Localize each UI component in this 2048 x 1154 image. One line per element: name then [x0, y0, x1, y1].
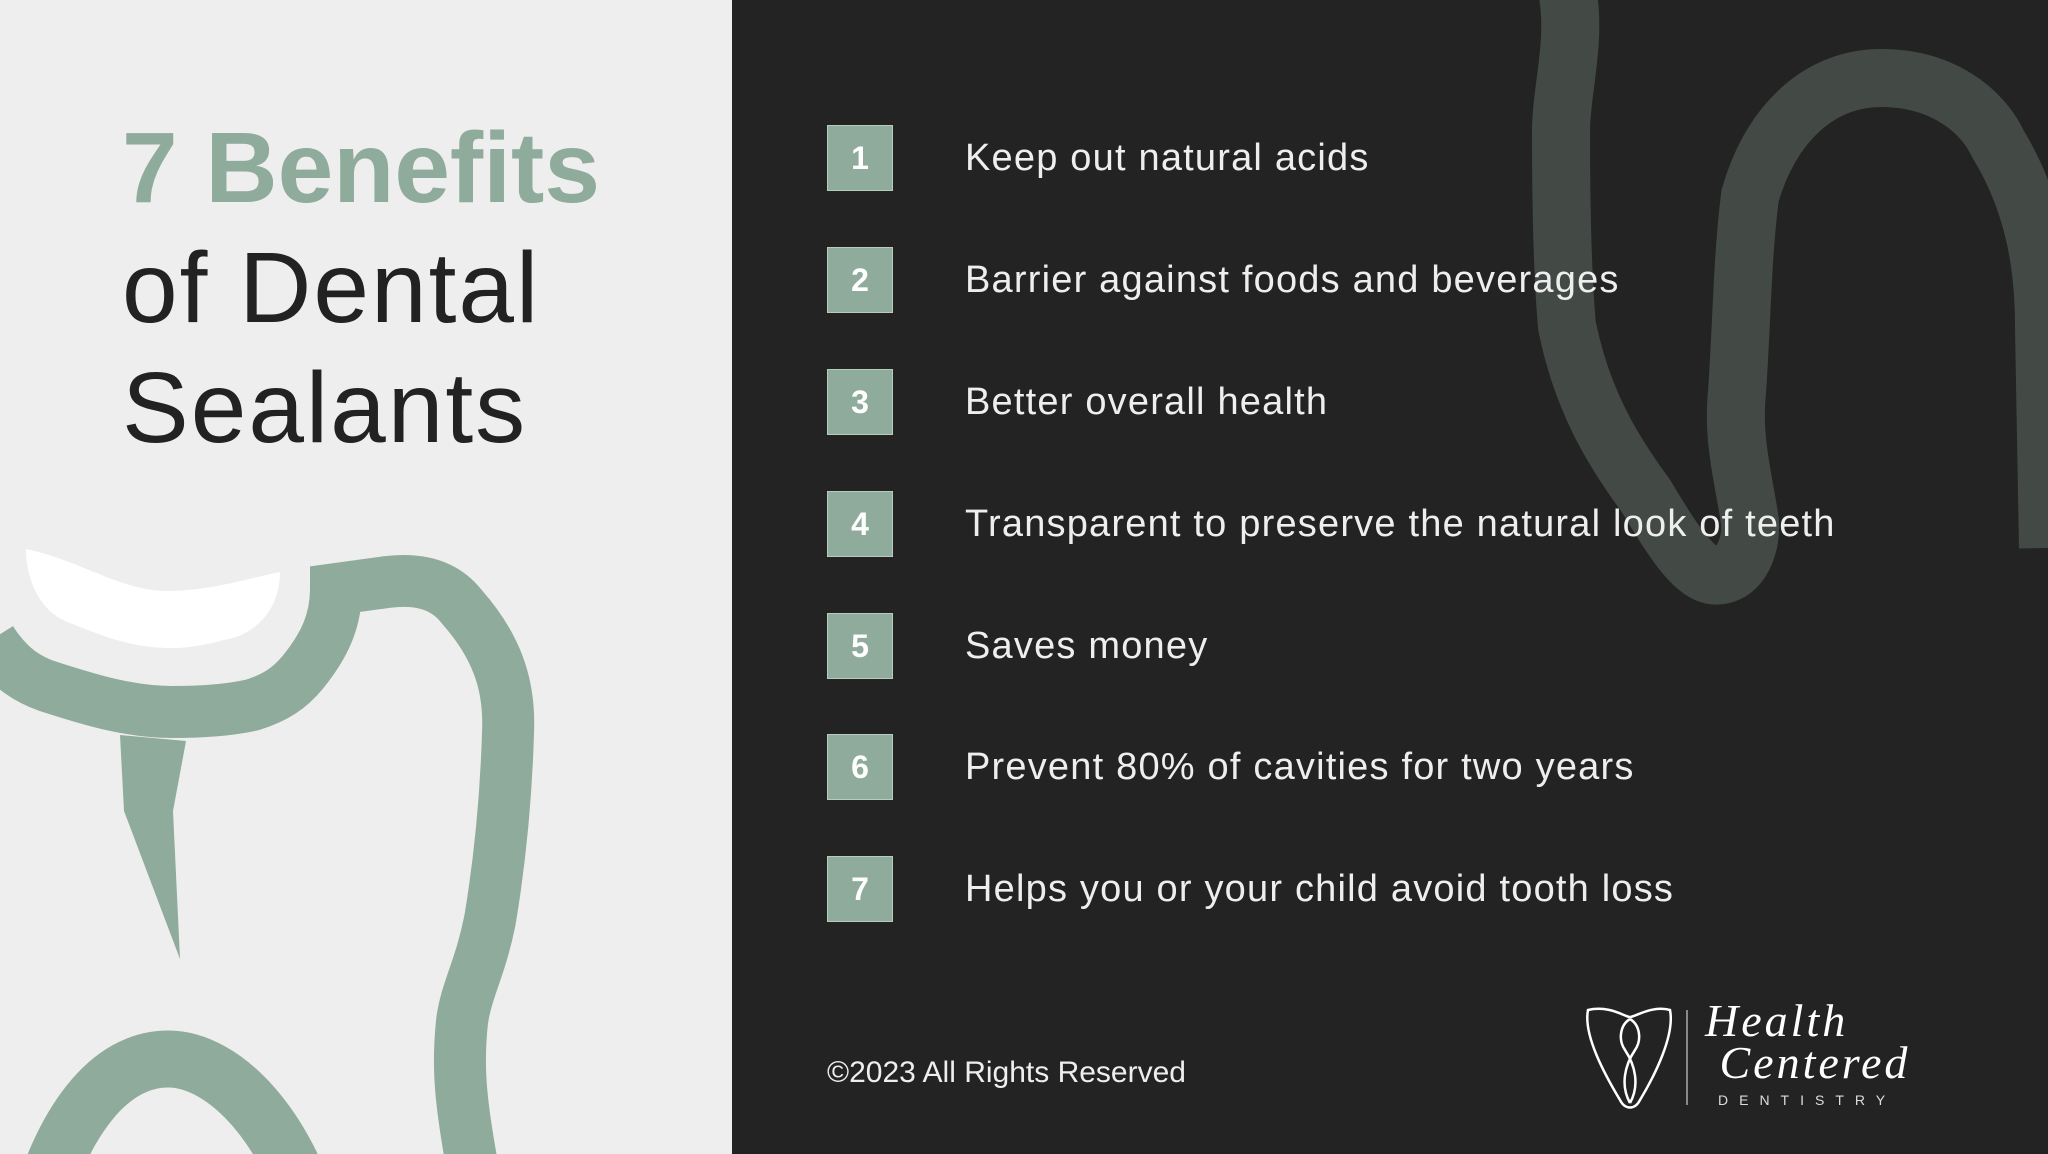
- list item 3: 3: [851, 384, 869, 420]
- tooth illustration: [0, 549, 534, 1154]
- list item 5: [827, 613, 1208, 679]
- list item 3: [827, 369, 1328, 435]
- logo text: Centered: [1720, 1037, 1910, 1088]
- list item 6: [827, 734, 1635, 800]
- list item 7: [827, 856, 1674, 922]
- list item 5: Saves money: [965, 625, 1208, 667]
- title: Sealants: [122, 352, 527, 464]
- list item 7: 7: [851, 871, 869, 907]
- list item 4: 4: [851, 506, 869, 542]
- list item 1: Keep out natural acids: [965, 137, 1370, 179]
- list item 5: 5: [851, 628, 869, 664]
- logo text: [1704, 1000, 1910, 1088]
- list item 4: [827, 491, 1836, 557]
- list item 1: 1: [851, 140, 869, 176]
- icon: tooth logo: [1586, 1008, 1672, 1109]
- list item 2: 2: [851, 262, 869, 298]
- list item 6: Prevent 80% of cavities for two years: [965, 746, 1635, 788]
- title: 7 Benefits: [122, 112, 600, 224]
- list item 7: Helps you or your child avoid tooth loss: [965, 868, 1674, 910]
- list item 2: [827, 247, 1620, 313]
- copyright: ©2023 All Rights Reserved: [827, 1056, 1186, 1089]
- list item 2: Barrier against foods and beverages: [965, 259, 1620, 301]
- title: [122, 112, 600, 464]
- title: of Dental: [122, 232, 540, 344]
- logo: [1586, 1000, 1910, 1109]
- list item 1: [827, 125, 1370, 191]
- decorative curve: [1532, 0, 2048, 604]
- list item 4: Transparent to preserve the natural look of teeth: [965, 503, 1836, 545]
- left panel: [0, 0, 732, 1154]
- list item 6: 6: [851, 749, 869, 785]
- logo: DENTISTRY: [1718, 1092, 1896, 1108]
- list item 3: Better overall health: [965, 381, 1328, 423]
